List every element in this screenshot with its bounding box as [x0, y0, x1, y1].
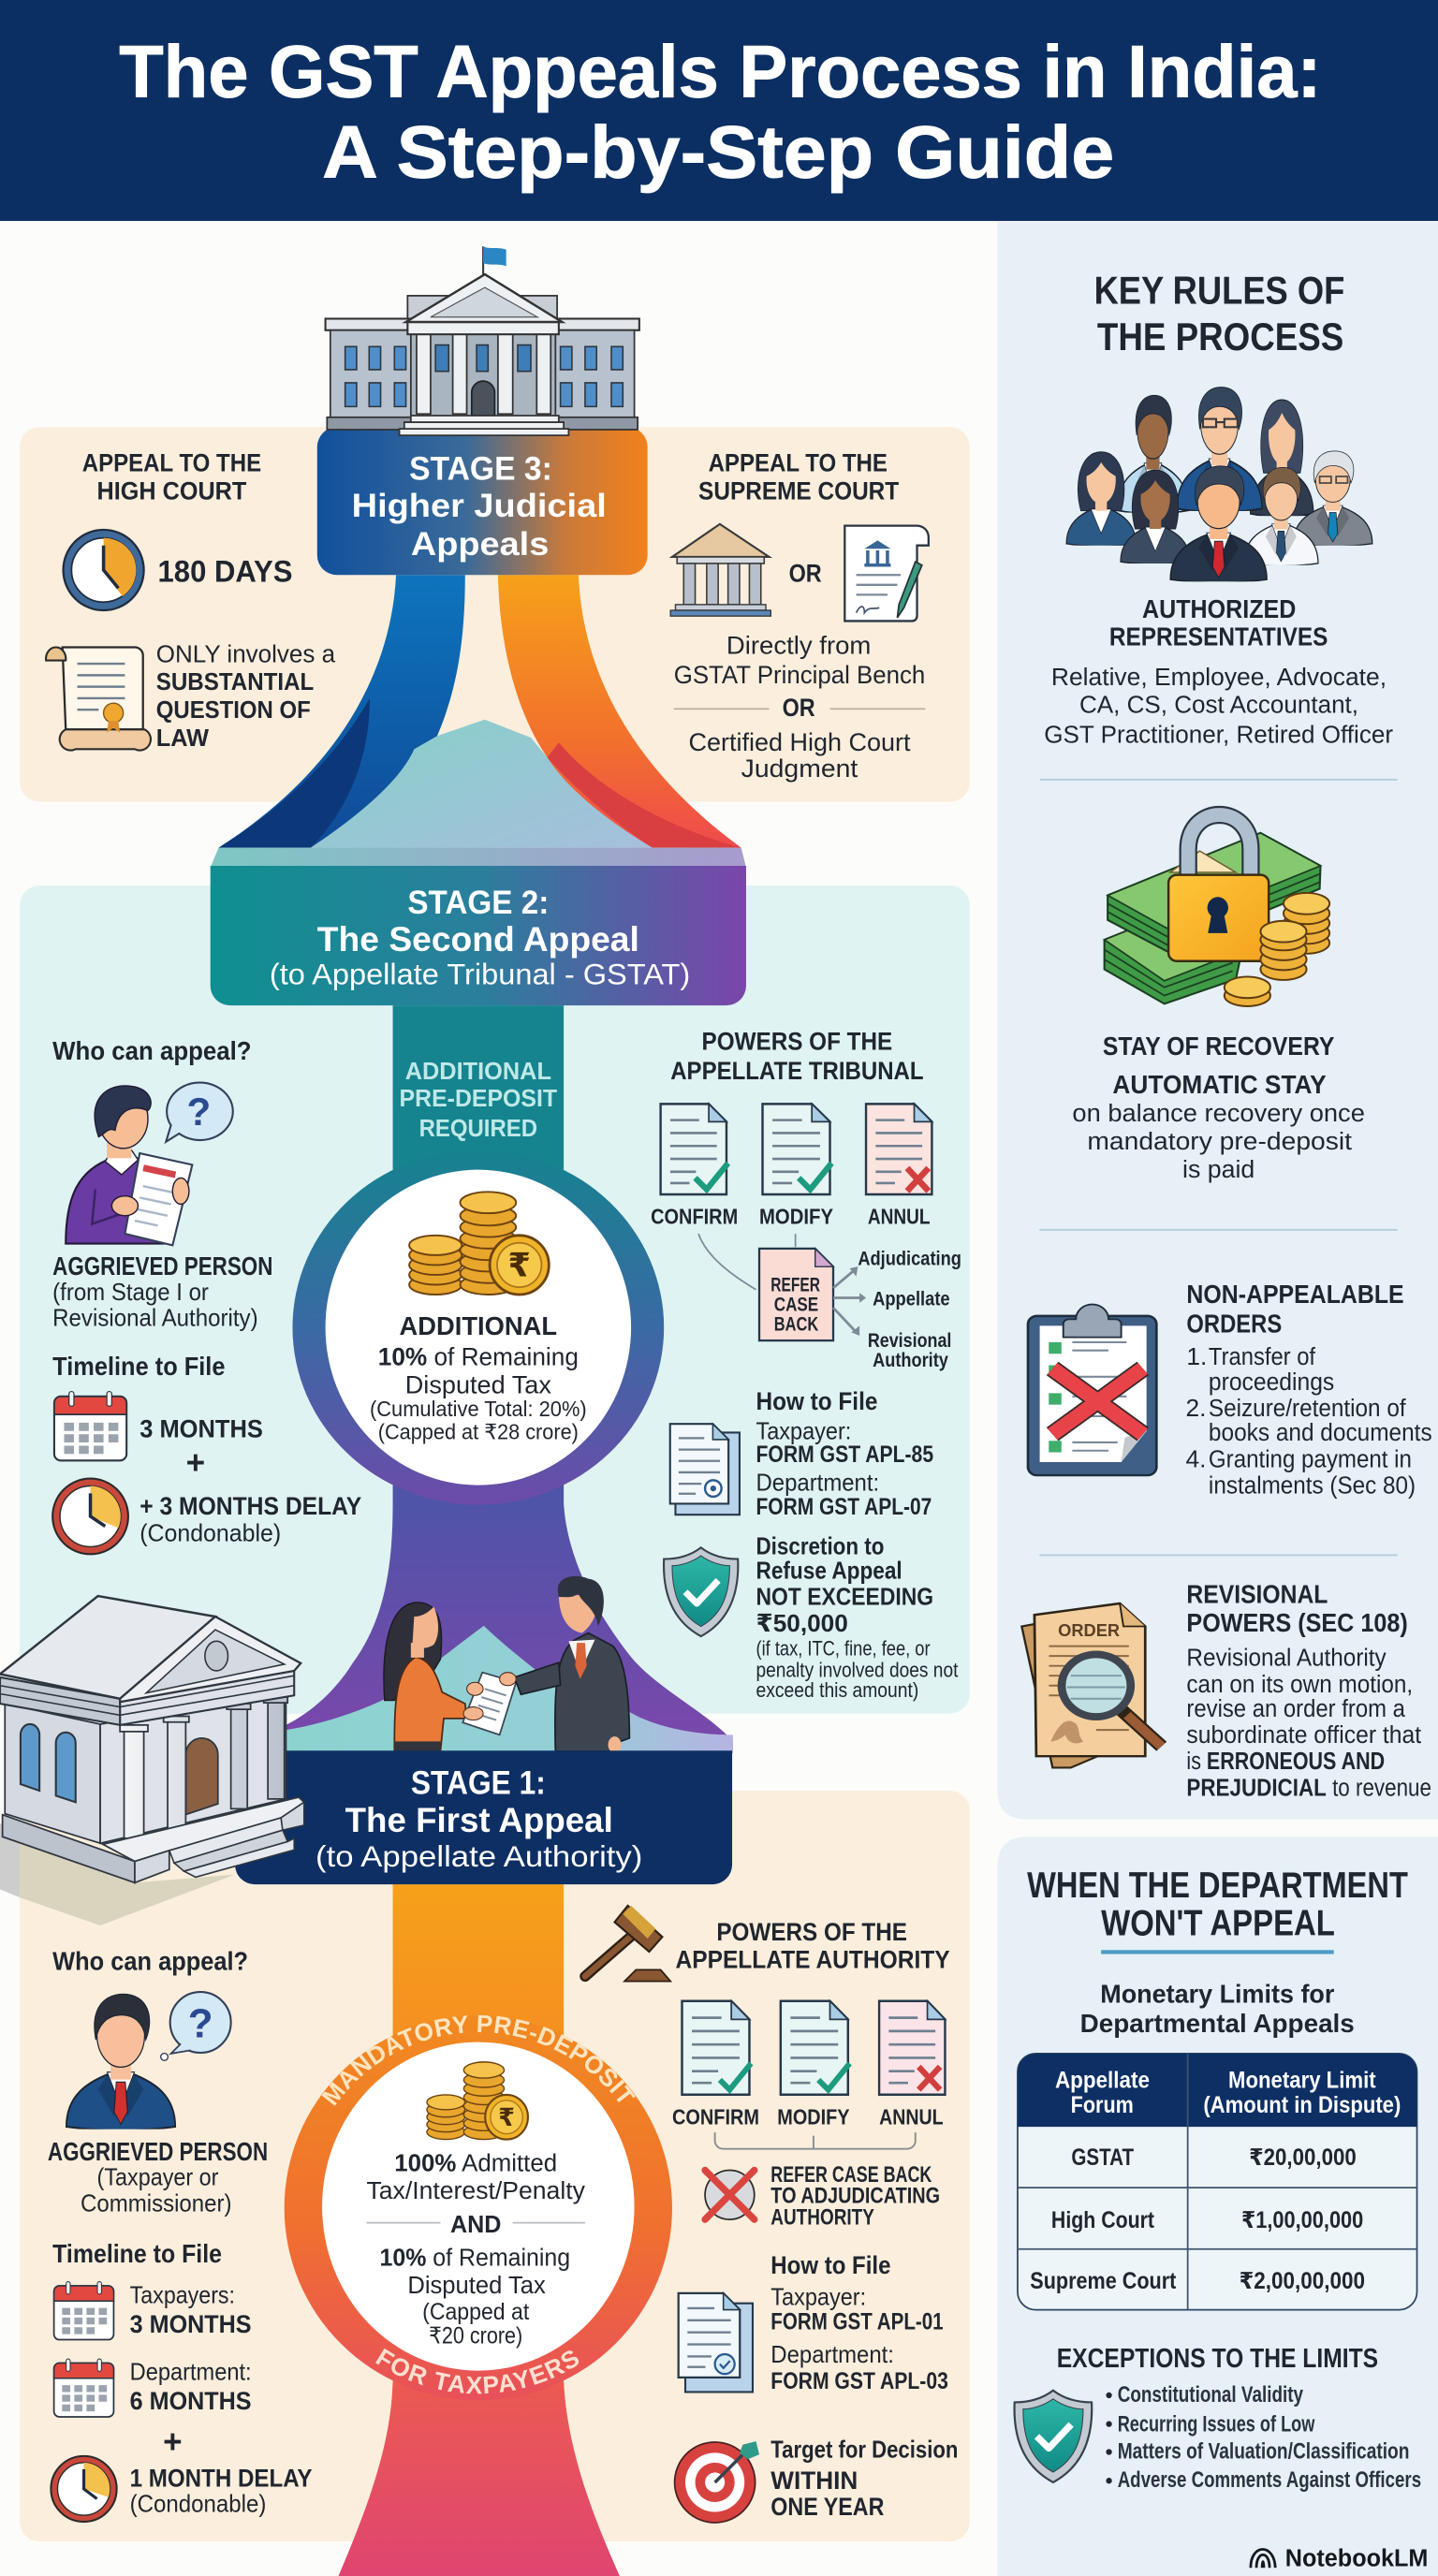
heading: stage 1 box: The First Appeal	[345, 1801, 613, 1839]
text: pre-deposit amounts	[366, 2148, 586, 2349]
text: authorized representatives: Relative, Employee, Advocate,	[1051, 663, 1387, 691]
text: additional amount: ADDITIONAL	[400, 1311, 557, 1340]
text: pre-deposit amounts: 100% Admitted	[394, 2148, 557, 2176]
text: refer case back	[770, 2163, 940, 2230]
text: target for decision	[770, 2437, 958, 2521]
icon: modify document	[763, 1104, 831, 1194]
heading: stage 3 box: STAGE 3:	[409, 450, 552, 487]
text: directly from bench or certified judgment: Certified High Court	[689, 727, 911, 756]
icon: group of representatives	[1066, 388, 1372, 582]
icon: high court building	[326, 246, 639, 435]
man	[500, 1576, 629, 1753]
table: monetary limits: ₹1,00,00,000	[1241, 2208, 1363, 2233]
list: exceptions: Recurring Issues of Low	[1118, 2413, 1315, 2437]
circle: additional pre-deposit	[292, 1150, 664, 1505]
text: directly from bench or certified judgment: OR	[783, 693, 815, 722]
text: how to file	[770, 2250, 948, 2394]
heading: key rules: KEY RULES OF	[1094, 269, 1344, 313]
curved label: for taxpayers: FOR TAXPAYERS	[375, 2348, 579, 2394]
icon: coins	[427, 2062, 528, 2140]
icon: annul document	[879, 2001, 945, 2095]
icon: confirm document	[661, 1104, 728, 1194]
text: taxpayers 3 months	[130, 2283, 252, 2338]
text: aggrieved person: AGGRIEVED PERSON	[52, 1251, 272, 1281]
heading: powers of the appellate authority	[675, 1918, 950, 1974]
text: discretion to refuse: ₹50,000	[756, 1609, 848, 1637]
panel: stage 3 details	[20, 427, 970, 801]
text: non-appealable orders: Seizure/retention of	[1209, 1394, 1406, 1422]
text: pre-deposit amounts: Disputed Tax	[407, 2271, 546, 2299]
arrow: orange ribbon from stage 2 to stage 3	[493, 575, 741, 848]
roof	[0, 1596, 215, 1699]
text: target for decision: Target for Decision	[770, 2437, 958, 2464]
text: non-appealable orders: 2.	[1186, 1394, 1206, 1422]
labels: confirm modify annul: MODIFY	[759, 1205, 833, 1229]
flow: refer case back	[698, 1234, 961, 1371]
text: additional pre-deposit required: ADDITIONAL	[405, 1057, 551, 1085]
text: substantial question of law	[156, 639, 335, 752]
text: taxpayers 3 months: 3 MONTHS	[130, 2309, 252, 2338]
text: one month delay: 1 MONTH DELAY	[130, 2463, 313, 2492]
text: aggrieved person: (from Stage I or	[52, 1280, 209, 1306]
icon: clipboard with red cross	[1028, 1305, 1156, 1475]
stem above ring	[393, 1005, 564, 1170]
icon: question bubble: ?	[188, 2000, 213, 2046]
text: revisional powers	[1186, 1579, 1431, 1801]
text: how to file: FORM GST APL-07	[756, 1495, 932, 1520]
text: non-appealable orders: 1.	[1186, 1342, 1207, 1370]
stage 2 spine	[286, 1005, 733, 1753]
text: additional amount: Disputed Tax	[405, 1369, 551, 1398]
text: how to file: Taxpayer:	[770, 2284, 866, 2310]
text: additional pre-deposit required: REQUIRED	[419, 1114, 537, 1142]
heading: powers of the appellate authority: POWERS OF THE	[716, 1918, 907, 1946]
icon: appellate authority building	[0, 1596, 304, 1882]
panel: stage 1 details	[20, 1791, 970, 2541]
list: exceptions: Constitutional Validity	[1118, 2383, 1304, 2408]
table: monetary limits: Monetary Limit	[1228, 2069, 1376, 2094]
text: aggrieved person: Commissioner)	[81, 2190, 232, 2217]
text: 180 days: 180 DAYS	[158, 554, 292, 588]
text: target for decision: ONE YEAR	[770, 2492, 885, 2521]
panel: key rules of the process	[998, 222, 1438, 1820]
text: directly from bench or certified judgment	[674, 631, 925, 783]
heading: who can appeal: Who can appeal?	[52, 1036, 252, 1065]
panel: stage 2 details	[20, 886, 970, 1714]
labels: confirm modify annul: CONFIRM	[651, 1205, 738, 1229]
text: discretion to refuse: Refuse Appeal	[756, 1559, 902, 1585]
text: stay of recovery: mandatory pre-deposit	[1087, 1127, 1353, 1155]
text: revisional powers: POWERS (SEC 108)	[1186, 1608, 1408, 1637]
text: non-appealable orders: instalments (Sec 80)	[1209, 1471, 1416, 1499]
labels: confirm modify annul: ANNUL	[879, 2104, 944, 2129]
heading: timeline to file: Timeline to File	[52, 1352, 225, 1381]
logo: NotebookLM: NotebookLM	[1285, 2543, 1428, 2571]
door	[185, 1738, 218, 1815]
icon: filing forms	[670, 1424, 740, 1515]
text: pre-deposit amounts: 10% of Remaining	[380, 2243, 570, 2271]
table: monetary limits: Appellate	[1055, 2069, 1150, 2094]
heading: stage 1 box: (to Appellate Authority)	[315, 1839, 642, 1873]
heading: appeal to the high court: HIGH COURT	[97, 477, 247, 505]
icon: delay clock	[51, 2456, 117, 2522]
text: additional pre-deposit required: PRE-DEPOSIT	[400, 1084, 557, 1112]
text: non-appealable orders: 4.	[1186, 1444, 1206, 1472]
text: additional amount: 10% of Remaining	[378, 1341, 579, 1370]
icon: target with arrow	[675, 2441, 759, 2523]
stage 2 header top	[211, 848, 746, 868]
windows	[21, 1724, 76, 1802]
text: stay of recovery: STAY OF RECOVERY	[1103, 1032, 1335, 1061]
icon: certified judgment with pen	[844, 526, 929, 621]
text: non-appealable orders: Granting payment in	[1209, 1444, 1412, 1472]
entablature	[120, 1666, 294, 1725]
icon: calendar	[54, 1392, 126, 1460]
heading: who can appeal: Who can appeal?	[52, 1946, 248, 1975]
labels: confirm modify annul: MODIFY	[777, 2104, 850, 2129]
table: monetary limits: GSTAT	[1071, 2145, 1134, 2171]
flow: refer case back: Authority	[873, 1350, 948, 1371]
icon: temple	[670, 524, 770, 616]
icon: calendar department	[54, 2359, 113, 2417]
labels: confirm modify annul: ANNUL	[868, 1205, 931, 1229]
woman	[384, 1603, 467, 1751]
text: pre-deposit amounts: AND	[450, 2210, 501, 2238]
table: monetary limits	[1018, 2054, 1417, 2310]
text: revisional powers: Revisional Authority	[1186, 1644, 1387, 1672]
text: directly from bench or certified judgment: GSTAT Principal Bench	[674, 660, 925, 689]
text: substantial question of law: SUBSTANTIAL	[156, 667, 314, 695]
arrow: blue ribbon from stage 2 to stage 3	[218, 575, 493, 848]
text: directly from bench or certified judgment: Judgment	[741, 754, 858, 783]
heading: key rules: THE PROCESS	[1097, 315, 1343, 359]
heading: exceptions to the limits: EXCEPTIONS TO THE LIMITS	[1057, 2344, 1378, 2374]
text: non-appealable orders: NON-APPEALABLE	[1186, 1280, 1404, 1309]
text: how to file: Department:	[756, 1471, 879, 1497]
text: how to file: How to File	[770, 2250, 890, 2279]
left wall	[5, 1704, 100, 1843]
text: pre-deposit amounts: Tax/Interest/Penalty	[366, 2176, 586, 2204]
text: department 6 months: 6 MONTHS	[130, 2386, 252, 2415]
icon: filing forms	[679, 2293, 753, 2392]
title banner: The GST Appeals Process in India:	[119, 31, 1321, 113]
table: monetary limits: Forum	[1071, 2093, 1134, 2118]
text: stay of recovery: is paid	[1182, 1155, 1255, 1183]
heading: when the department won't appeal: WON'T APPEAL	[1101, 1904, 1335, 1944]
icon: person reading a notice	[66, 1086, 192, 1245]
heading: stage 2 box: (to Appellate Tribunal - GSTAT)	[270, 957, 690, 990]
text: additional pre-deposit required	[400, 1057, 557, 1142]
text: how to file	[756, 1386, 933, 1520]
document	[462, 1673, 516, 1734]
text: non-appealable orders: ORDERS	[1186, 1309, 1282, 1338]
heading: stage 1 box	[235, 1750, 732, 1884]
text: plus: +	[163, 2423, 183, 2460]
text: revisional powers: subordinate officer that	[1186, 1720, 1422, 1749]
text: how to file: FORM GST APL-85	[756, 1442, 933, 1468]
text: how to file: FORM GST APL-03	[770, 2369, 948, 2394]
heading: key rules	[1094, 269, 1344, 359]
heading: stage 2 box	[211, 866, 746, 1005]
text: how to file: How to File	[756, 1386, 877, 1415]
list: exceptions	[1106, 2383, 1421, 2493]
text: aggrieved person: (Taxpayer or	[97, 2164, 219, 2190]
text: additional amount	[370, 1311, 587, 1443]
heading: stage 3 box	[317, 427, 648, 575]
icon: shield with check	[1015, 2391, 1092, 2482]
icon: clock 180 days	[64, 530, 144, 610]
icon: calendar taxpayers	[54, 2282, 113, 2340]
text: revisional powers: revise an order from a	[1186, 1694, 1405, 1722]
text: refer case back: REFER CASE BACK	[770, 2163, 932, 2188]
table: monetary limits: ₹2,00,00,000	[1240, 2269, 1365, 2294]
heading: when the department won't appeal	[1027, 1866, 1408, 1954]
icon: order under magnifying glass: ORDER	[1058, 1621, 1120, 1641]
text: discretion to refuse: penalty involved does not	[756, 1658, 958, 1681]
text: department 6 months: Department:	[130, 2359, 252, 2385]
text: one month delay	[130, 2463, 313, 2518]
shadow under building	[0, 1823, 235, 1925]
text: non-appealable orders: proceedings	[1209, 1368, 1334, 1396]
heading: stage 2 box: The Second Appeal	[317, 920, 639, 959]
flow: refer case back: Appellate	[873, 1289, 950, 1310]
text: non-appealable orders	[1186, 1280, 1432, 1499]
flow: refer case back: Adjudicating	[858, 1248, 961, 1269]
text: non-appealable orders: Transfer of	[1209, 1342, 1316, 1370]
text: pre-deposit amounts: (Capped at	[422, 2300, 529, 2325]
text: how to file: Taxpayer:	[756, 1418, 851, 1444]
icon: delay clock	[52, 1479, 128, 1554]
icon: annul document	[866, 1104, 932, 1194]
platform	[103, 1797, 304, 1862]
text: department 6 months	[130, 2359, 252, 2415]
labels: confirm modify annul	[651, 1205, 931, 1229]
text: discretion to refuse	[756, 1533, 958, 1702]
labels: confirm modify annul	[672, 2104, 944, 2129]
text: discretion to refuse: Discretion to	[756, 1533, 884, 1559]
text: how to file: Department:	[770, 2342, 894, 2368]
heading: timeline to file: Timeline to File	[52, 2239, 222, 2268]
text: condonable delay: (Condonable)	[139, 1520, 281, 1546]
table: monetary limits: (Amount in Dispute)	[1203, 2093, 1401, 2118]
labels: confirm modify annul: CONFIRM	[672, 2104, 759, 2129]
text: stay of recovery: AUTOMATIC STAY	[1112, 1070, 1327, 1099]
flow: refer case back: BACK	[774, 1314, 818, 1336]
icon: coins	[409, 1192, 549, 1295]
table: monetary limits: ₹20,00,000	[1249, 2145, 1357, 2171]
text: revisional powers: REVISIONAL	[1186, 1579, 1328, 1608]
flare below ring	[286, 1479, 733, 1753]
icon: scroll with seal	[46, 648, 151, 751]
flow: refer case back: CASE	[774, 1295, 818, 1316]
text: refer case back: TO ADJUDICATING	[770, 2185, 940, 2209]
text: refer case back: AUTHORITY	[770, 2205, 874, 2230]
text: stay of recovery: on balance recovery once	[1072, 1099, 1365, 1127]
text: directly from bench or certified judgment: Directly from	[726, 631, 871, 660]
text: revisional powers: is ERRONEOUS AND	[1186, 1747, 1385, 1775]
heading: stage 1 box: STAGE 1:	[411, 1765, 546, 1802]
text: discretion to refuse: exceed this amount)	[756, 1678, 918, 1702]
text: authorized representatives: GST Practitioner, Retired Officer	[1044, 720, 1393, 748]
text: taxpayers 3 months: Taxpayers:	[130, 2283, 235, 2309]
icon: modify document	[781, 2001, 850, 2095]
subheading: monetary limits: Monetary Limits for	[1100, 1979, 1334, 2008]
text: 3 months: 3 MONTHS	[139, 1414, 263, 1443]
icon: confirm document	[682, 2001, 751, 2095]
flow: refer case back: REFER	[770, 1275, 820, 1296]
heading: appeal to the supreme court: APPEAL TO THE	[709, 449, 888, 477]
icon: order under magnifying glass	[1021, 1603, 1162, 1767]
heading: stage 2 box: STAGE 2:	[407, 885, 549, 921]
text: aggrieved person	[48, 2137, 268, 2217]
text: aggrieved person: Revisional Authority)	[52, 1305, 258, 1331]
text: authorized representatives: CA, CS, Cost Accountant,	[1079, 691, 1358, 719]
heading: stage 3 box: Higher Judicial	[352, 488, 607, 524]
heading: appeal to the supreme court	[698, 449, 900, 505]
mountain: path to stage 2	[286, 1626, 733, 1753]
flow: refer case back: Revisional	[868, 1330, 951, 1352]
icon: padlock on money and coins	[1105, 815, 1329, 1006]
heading: stage 3 box: Appeals	[411, 526, 549, 563]
text: authorized representatives	[1044, 594, 1393, 748]
heading: appeal to the high court	[82, 449, 261, 505]
curved label: mandatory pre-deposit: MANDATORY PRE-DEPOSIT	[322, 2014, 636, 2106]
icon: red cross circle	[705, 2170, 755, 2219]
heading: powers of the appellate tribunal	[670, 1028, 924, 1085]
icon: speech bubble with question mark: ?	[187, 1090, 211, 1134]
bracket connector	[715, 2132, 916, 2149]
table: monetary limits: Supreme Court	[1030, 2269, 1176, 2294]
text: substantial question of law: ONLY involves a	[156, 639, 335, 667]
text: how to file: FORM GST APL-01	[770, 2310, 944, 2335]
circle: mandatory pre-deposit	[285, 2014, 672, 2394]
text: or: OR	[789, 558, 822, 587]
table: monetary limits: High Court	[1051, 2208, 1154, 2233]
text: pre-deposit amounts: ₹20 crore)	[429, 2324, 522, 2349]
heading: powers of the appellate authority: APPELLATE AUTHORITY	[675, 1946, 950, 1974]
icon: gavel	[585, 1906, 670, 1982]
text: stay of recovery	[1072, 1032, 1365, 1183]
mountain: path to stage 3	[311, 720, 653, 848]
text: aggrieved person	[52, 1251, 272, 1331]
text: plus: +	[186, 1444, 205, 1481]
subheading: monetary limits: Departmental Appeals	[1080, 2009, 1355, 2038]
text: one month delay: (Condonable)	[130, 2492, 266, 2518]
text: target for decision: WITHIN	[770, 2466, 858, 2495]
steps	[169, 1818, 283, 1863]
heading: powers of the appellate tribunal: APPELLATE TRIBUNAL	[670, 1057, 924, 1085]
subheading: monetary limits	[1080, 1979, 1355, 2038]
icon: question bubble	[161, 1992, 231, 2060]
text: condonable delay	[139, 1491, 361, 1546]
illustration: taxpayer handing appeal to officer	[384, 1576, 629, 1753]
text: discretion to refuse: NOT EXCEEDING	[756, 1583, 933, 1611]
icon: shield	[664, 1547, 738, 1636]
text: additional amount: (Capped at ₹28 crore)	[378, 1419, 579, 1443]
heading: powers of the appellate tribunal: POWERS OF THE	[702, 1028, 892, 1056]
text: authorized representatives: AUTHORIZED	[1142, 594, 1296, 623]
title banner: A Step-by-Step Guide	[322, 111, 1114, 194]
text: aggrieved person: AGGRIEVED PERSON	[48, 2137, 268, 2166]
stage 1 lower stem tint	[339, 2382, 620, 2576]
columns	[120, 1697, 287, 1838]
heading: appeal to the high court: APPEAL TO THE	[82, 449, 261, 477]
front wall	[100, 1692, 286, 1843]
text: revisional powers: can on its own motion,	[1186, 1670, 1413, 1698]
text: condonable delay: + 3 MONTHS DELAY	[139, 1491, 361, 1520]
stage 1 stem	[339, 1884, 620, 2576]
text: substantial question of law: LAW	[156, 724, 209, 752]
icon: speech bubble with question mark	[166, 1083, 233, 1142]
title banner	[0, 0, 1438, 221]
heading: appeal to the supreme court: SUPREME COURT	[698, 477, 900, 505]
icon: aggrieved person in suit	[66, 1994, 175, 2130]
text: authorized representatives: REPRESENTATIVES	[1109, 622, 1328, 651]
text: discretion to refuse: (if tax, ITC, fine, fee, or	[756, 1636, 931, 1660]
text: additional amount: (Cumulative Total: 20%)	[370, 1397, 587, 1421]
panel: when the department won't appeal	[998, 1837, 1438, 2576]
text: substantial question of law: QUESTION OF	[156, 695, 311, 724]
